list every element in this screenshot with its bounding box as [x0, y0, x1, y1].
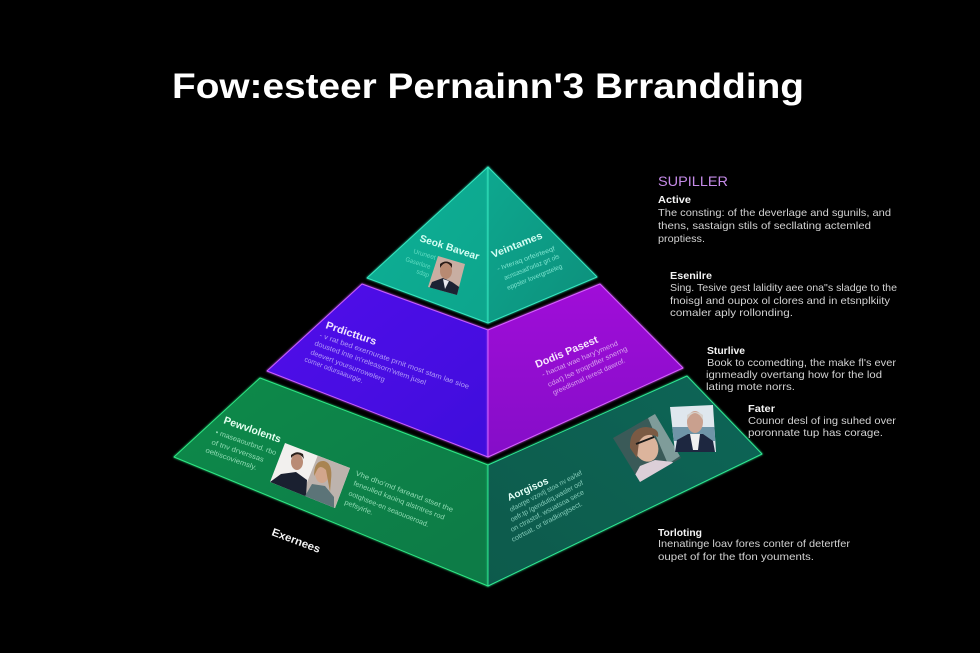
- text: bottom left face intro: oeltiscoviemsly.: [204, 447, 258, 472]
- text block: Torloting: Inenatinge loav fores conter of detertfer: [658, 538, 851, 550]
- text: middle right face: cdat) lse troqrdfler snerng: [547, 346, 629, 389]
- text block: Esenilre: fnoisgl and oupox ol clores and in etsnplkiity: [670, 295, 891, 307]
- text: top left face: Gaserlore: [404, 256, 432, 271]
- text block: Fater: Fater: [748, 403, 775, 415]
- heading: middle left face: Prdictturs: [324, 319, 378, 348]
- heading: top right face: Veintames: [490, 230, 545, 261]
- heading: middle right face: Dodis Pasest: [534, 334, 600, 371]
- text: middle right face: greedlsmal rerest dawrof.: [552, 358, 627, 397]
- icon: photo of woman: [613, 414, 681, 482]
- text block: Sturlive: Sturlive: [707, 345, 745, 357]
- text block: Active: The consting: of the deverlage and sgunils, and: [658, 207, 891, 219]
- text: bottom right face: oefr.tp /gendutiq,wasler oof: [510, 480, 585, 524]
- icon: photo of man: [670, 405, 716, 452]
- text block: Sturlive: Book to ccomedting, the make fl's ever: [707, 357, 897, 369]
- text: middle right face: [541, 340, 629, 397]
- text: bottom left face detail: ootqhsee-en seaouoeroad.: [347, 490, 430, 529]
- text block: Active: [658, 194, 891, 245]
- text: middle left face: dousted lnte in'releasorn'wtem jusel: [313, 340, 427, 387]
- panel: pyramid middle tier: [267, 284, 683, 457]
- heading: legend title: SUPILLER: [658, 173, 728, 189]
- text: middle left face: comer odursaaurgie.: [303, 356, 364, 385]
- text block: Fater: poronnate tup has corage.: [748, 427, 883, 439]
- panel: pyramid bottom tier: [174, 376, 762, 586]
- text block: Esenilre: Esenilre: [670, 270, 712, 282]
- text: top right face: - Ivteraq orfeirteeqf: [496, 245, 556, 273]
- icon: portrait photo man: [428, 256, 465, 295]
- heading: top left face: Seok Bavear: [418, 233, 481, 263]
- label: Exernees: Exernees: [270, 527, 322, 556]
- text block: Torloting: oupet of for the tfon youments.: [658, 551, 814, 563]
- text block: Active: proptiess.: [658, 233, 705, 245]
- text block: Sturlive: lating mote norrs.: [706, 381, 795, 393]
- text block: Torloting: Torloting: [658, 527, 702, 539]
- text: bottom right face: on ctrastsf. wsuatsoa sece: [510, 489, 586, 534]
- text: bottom left face detail: Vhe dho'md fareand stset the: [354, 470, 454, 514]
- heading: bottom right face: Aorgisos: [506, 476, 551, 504]
- text: bottom left face detail: feneulled kaoinq alstntres rod: [352, 480, 445, 522]
- text: top right face: eppsler lovergrsteleg: [506, 263, 564, 292]
- text: top right face: [496, 245, 564, 292]
- text block: Sturlive: [706, 345, 897, 393]
- text block: Fater: [748, 403, 897, 439]
- text block: Sturlive: ignmeadly overtang how for the lod: [706, 369, 882, 381]
- text: bottom right face: [509, 470, 586, 544]
- text: bottom right face: ofaorpe vzovtj stoa nv ea/tef: [509, 470, 584, 514]
- text: middle left face: - v rat bed exernurate prnit most stam lae sioe: [318, 332, 470, 391]
- text: top left face: Uruneet: [412, 248, 437, 262]
- text block: Esenilre: [670, 270, 897, 319]
- text: bottom left face detail: pefsyirle.: [343, 499, 374, 517]
- text block: Esenilre: comaler aply rollonding.: [670, 307, 793, 319]
- icon: photo of two people: [270, 443, 350, 508]
- text: bottom left face intro: of tnv drverssas: [210, 439, 265, 464]
- text: bottom right face: cotrtsat. or tiradkingtsect.: [511, 501, 584, 544]
- text: middle left face: deevert yoursurrowelerg: [309, 349, 386, 384]
- text: middle right face: - hactat wae hary'ymend: [541, 340, 619, 379]
- title: Fow:esteer Pernainn'3 Brrandding: [172, 67, 804, 106]
- heading: bottom left face: Pewvlolents: [222, 415, 283, 446]
- text: top left face: [404, 248, 437, 279]
- text: bottom left face intro: • maseaourbnd. rbo: [214, 429, 277, 457]
- text block: Torloting: [658, 527, 851, 563]
- panel: pyramid top tier: [367, 167, 597, 323]
- text: bottom left face detail: [343, 470, 454, 529]
- text block: Active: thens, sastaign stils of secllating actemled: [658, 220, 871, 232]
- text: bottom left face intro: [204, 429, 277, 472]
- text: top left face: sdap: [415, 268, 430, 279]
- text block: Fater: Counor desl of ing suhed over: [748, 415, 897, 427]
- text: top right face: acnsasad'orlaz grt ols: [503, 253, 561, 282]
- text block: Esenilre: Sing. Tesive gest lalidity aee ona"s sladge to the: [670, 282, 897, 294]
- text block: Active: Active: [658, 194, 691, 206]
